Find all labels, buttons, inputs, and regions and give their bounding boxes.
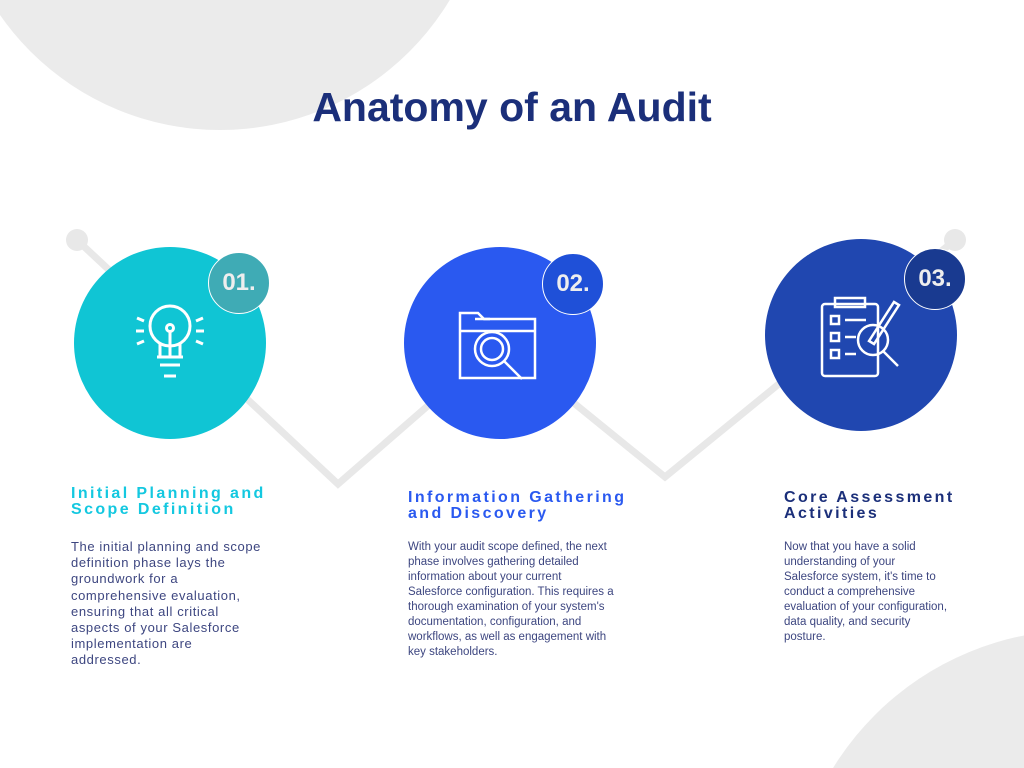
badge 01	[208, 252, 270, 314]
text block 3: evaluation of your configuration,	[784, 601, 947, 613]
text block 3: Now that you have a solid	[784, 541, 916, 553]
badge 02	[542, 253, 604, 315]
text block 2: thorough examination of your system's	[408, 601, 605, 613]
text block 1: Scope Definition	[71, 501, 236, 518]
text block 1: definition phase lays the	[71, 555, 225, 570]
text block 1: The initial planning and scope	[71, 539, 261, 554]
text block 1: aspects of your Salesforce	[71, 620, 240, 635]
badge 03: 03.	[918, 265, 952, 292]
badge 01: 01.	[222, 269, 256, 296]
text block 3: data quality, and security	[784, 616, 910, 628]
text block 2: information about your current	[408, 571, 561, 583]
text block 1: implementation are	[71, 636, 192, 651]
text block 3: conduct a comprehensive	[784, 586, 915, 598]
step 2 circle with folder search icon	[404, 247, 596, 439]
text block 3: Core Assessment	[784, 489, 955, 506]
text block 2: phase involves gathering detailed	[408, 556, 579, 568]
text block 2: With your audit scope defined, the next	[408, 541, 607, 553]
text block 3: posture.	[784, 631, 826, 643]
title: Anatomy of an Audit	[312, 84, 712, 130]
text block 1: addressed.	[71, 652, 141, 667]
text block 1: Initial Planning and	[71, 485, 266, 502]
text block 2: documentation, configuration, and	[408, 616, 581, 628]
text block 2: and Discovery	[408, 505, 549, 522]
badge 03	[904, 248, 966, 310]
badge 02: 02.	[556, 270, 590, 297]
text block 3	[784, 489, 955, 643]
text block 3: understanding of your	[784, 556, 895, 568]
text block 2: Information Gathering	[408, 489, 626, 506]
step 1 circle with lightbulb icon	[74, 247, 266, 439]
text block 2	[408, 489, 626, 658]
text block 1: comprehensive evaluation,	[71, 588, 241, 603]
text block 2: Salesforce configuration. This requires a	[408, 586, 614, 598]
text block 1: ensuring that all critical	[71, 604, 219, 619]
text block 3: Activities	[784, 505, 879, 522]
text block 2: key stakeholders.	[408, 646, 498, 658]
step 3 circle with checklist icon	[765, 239, 957, 431]
text block 1	[71, 485, 266, 667]
text block 3: Salesforce system, it's time to	[784, 571, 936, 583]
text block 2: workflows, as well as engagement with	[408, 631, 606, 643]
text block 1: groundwork for a	[71, 571, 178, 586]
